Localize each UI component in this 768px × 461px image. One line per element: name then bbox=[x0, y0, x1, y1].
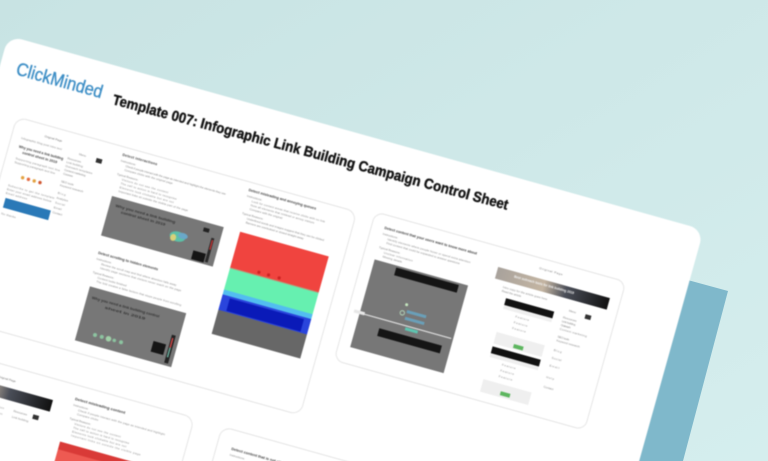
original page: sidebar: Keyword research bbox=[556, 338, 581, 349]
text: detect misleading bbox=[240, 188, 332, 246]
text: detect misleading: Detect misleading and annoying queues bbox=[248, 188, 317, 211]
sidebar bbox=[52, 149, 103, 223]
original page: article: Feature bbox=[515, 314, 530, 322]
original page: sidebar: Link building bbox=[561, 319, 576, 327]
heatmap: colour bands bbox=[212, 232, 329, 359]
heatmap: scrolling: Why you need a link building control bbox=[91, 296, 160, 319]
text: detect misleading: Underlined words and images suggest that they can be clicked bbox=[246, 217, 325, 242]
sidebar: Keyword research bbox=[60, 183, 84, 194]
sidebar: Content marketing bbox=[64, 168, 86, 178]
text: detect misleading: Note all elements that mislead or annoy visitors bbox=[250, 203, 315, 225]
original page column: Original Page bbox=[44, 134, 63, 143]
text: detect scrolling: Instructions: bbox=[96, 257, 112, 265]
text: detect misleading: Instructions: bbox=[247, 194, 263, 202]
original page column: Why you need a link building bbox=[18, 145, 64, 161]
sidebar: Menu bbox=[79, 152, 87, 158]
text: detect interactions: Visitors do not see the content bbox=[121, 178, 169, 194]
original page: article: Feature bbox=[498, 374, 513, 382]
panel outline bbox=[158, 427, 540, 461]
original page: sidebar: Menu bbox=[569, 309, 577, 315]
sidebar: Analytics bbox=[56, 196, 69, 203]
text: detect interactions bbox=[112, 153, 229, 221]
original page column: Supporting paragraph text line bbox=[14, 160, 56, 175]
text: detect misleading content: Detect misleading content bbox=[75, 397, 127, 415]
original page: article: Feature bbox=[502, 363, 516, 370]
original page column bbox=[0, 128, 71, 228]
text: detect interactions: Important links sit outside the visible part of the page bbox=[118, 189, 189, 212]
text: detect misleading content: Compare clicks bbox=[77, 412, 99, 422]
sidebar: Contact bbox=[52, 210, 63, 217]
heatmap: scrolling bbox=[75, 286, 186, 367]
original page: sidebar: Help bbox=[546, 375, 555, 381]
original page: article: Original Page bbox=[539, 266, 563, 277]
original page column: Email address bbox=[5, 191, 28, 201]
text: detect misleading content: Visitors do not see the content bbox=[74, 422, 121, 439]
sidebar: Courses bbox=[63, 172, 74, 178]
text: detect misleading: Compare with the original bbox=[249, 207, 283, 220]
text: detect misleading: Banners are overlooked or closed straight away bbox=[245, 220, 305, 241]
heatmap: attention bbox=[344, 258, 468, 373]
sidebar: Resources bbox=[67, 156, 82, 164]
sidebar: Link building bbox=[66, 160, 84, 169]
text: detect scrolling: Identify page sections that visitors never reach on the page bbox=[100, 266, 182, 293]
text: detect interactions: Elements look clickable but are not bbox=[119, 185, 174, 204]
text: detect interactions: Compare clicks with the original page bbox=[124, 168, 174, 185]
heatmap: interactions bbox=[101, 196, 224, 267]
logo: ClickMinded bbox=[14, 59, 105, 102]
panel outline bbox=[0, 330, 194, 461]
heatmap: interactions: Why you need a link building bbox=[115, 204, 176, 224]
original page: Resources bbox=[13, 409, 28, 417]
teal accent panel bbox=[590, 267, 728, 461]
original page: sidebar: Outreach bbox=[560, 323, 571, 330]
original page: article: Feature bbox=[500, 368, 515, 376]
original page column: Subscribe to get the template bbox=[8, 183, 55, 200]
text: detect scrolling: Detect scrolling to hidden elements bbox=[98, 251, 158, 271]
panel: bottom right bbox=[158, 427, 540, 461]
heatmap: interactions: control sheet in 2019 bbox=[120, 211, 166, 227]
original page: sidebar: SEO tools bbox=[557, 335, 570, 342]
text: detect misleading: Typical Reasons: bbox=[242, 211, 264, 221]
text: detect scrolling: Typical Reasons: bbox=[92, 270, 115, 280]
sidebar: SEO tools bbox=[61, 179, 75, 187]
text: detect scrolling: Review the scroll map and find where attention falls away bbox=[101, 262, 178, 287]
text: detect interactions: Instructions: bbox=[120, 159, 137, 167]
text: detect misleading content: Check if people interact with the page as intended and highlight bbox=[78, 408, 166, 436]
original page: article bbox=[465, 255, 613, 419]
original page bbox=[0, 360, 56, 428]
sidebar: Blog bbox=[57, 191, 67, 197]
original page: article: Feature bbox=[513, 320, 528, 328]
heatmap: red bbox=[49, 442, 149, 461]
text: detect content: Detect content that your users want to know more about bbox=[384, 226, 478, 256]
original page: article: Read the article bbox=[501, 289, 522, 298]
text: detect content: Unclear information bbox=[383, 251, 414, 263]
sidebar: Email bbox=[53, 205, 62, 211]
text: detect scrolling: Content looks finished bbox=[97, 276, 127, 288]
text: detect misleading: Look for content areas that receive clicks with no link bbox=[251, 199, 326, 224]
text: detect scrolling: The fold creates a false bottom that stops people from scrolling bbox=[96, 279, 182, 307]
text: detect interactions: Typical Reasons: bbox=[117, 172, 139, 182]
original page: sidebar: Content marketing bbox=[559, 327, 588, 338]
original page: sidebar: Blog bbox=[553, 348, 563, 354]
original page: Link building bbox=[11, 415, 29, 423]
text: detect content: Typical Reasons: bbox=[379, 245, 401, 255]
original page: sidebar: Social bbox=[551, 356, 562, 362]
text: detect content: Instructions: bbox=[382, 232, 399, 240]
text: detect interactions: Detect interactions bbox=[122, 153, 158, 166]
text: detect misleading content: Important links sit outside the visible page bbox=[71, 433, 141, 457]
sidebar: Outreach templates bbox=[65, 164, 93, 175]
text: detect misleading content: Typical Reasons: bbox=[69, 416, 92, 426]
original page: sidebar: Resources bbox=[563, 315, 578, 323]
original page: article: Feature bbox=[512, 326, 527, 334]
text: detect interactions: The call to action is hard to recognise bbox=[120, 181, 178, 201]
text: detect interactions: Check if people interact with the page as intended and highlight the elements they use bbox=[125, 164, 227, 196]
text: detect content: Instructions: bbox=[229, 453, 246, 461]
text: detect misleading content: The call to action is hard to recognise bbox=[73, 426, 130, 445]
title: Template 007: Infographic Link Building Campaign Control Sheet bbox=[111, 92, 510, 214]
original page column: control sheet in 2019 bbox=[22, 151, 58, 164]
text: detect misleading content: Instructions: bbox=[73, 403, 89, 411]
text: detect content: Missing details bbox=[382, 255, 403, 264]
text: detect content bbox=[376, 226, 478, 283]
text: detect content: Find content that could be expanded to answer questions bbox=[386, 241, 461, 266]
text: detect misleading content bbox=[65, 397, 168, 461]
panel: bottom left bbox=[0, 330, 194, 461]
original page column: No thanks bbox=[1, 211, 17, 219]
text: detect content: Identify elements where people hover or spend extra attention bbox=[387, 237, 471, 264]
original page: sidebar: Email bbox=[549, 363, 560, 370]
original page: sidebar: Contact bbox=[543, 385, 554, 391]
original page column: Supporting paragraph text line bbox=[15, 156, 61, 173]
original page: article: Best outreach tools for link building 2019 bbox=[514, 275, 574, 295]
panel outline bbox=[334, 212, 626, 430]
sidebar: Social bbox=[55, 200, 66, 207]
panel: top right bbox=[334, 212, 626, 430]
panel outline bbox=[0, 117, 357, 415]
original page: article: Intro copy for the article goes here bbox=[502, 285, 548, 301]
heatmap: scrolling: sheet in 2019 bbox=[104, 306, 146, 321]
text: detect misleading content: Elements look clickable but are not bbox=[72, 430, 127, 448]
original page column: Infographic blog post intro text bbox=[21, 136, 62, 151]
panel: top left bbox=[0, 117, 357, 415]
original page column: Enter your email address below bbox=[7, 187, 53, 204]
text: detect scrolling bbox=[90, 251, 190, 307]
original page: sidebar bbox=[543, 308, 593, 396]
